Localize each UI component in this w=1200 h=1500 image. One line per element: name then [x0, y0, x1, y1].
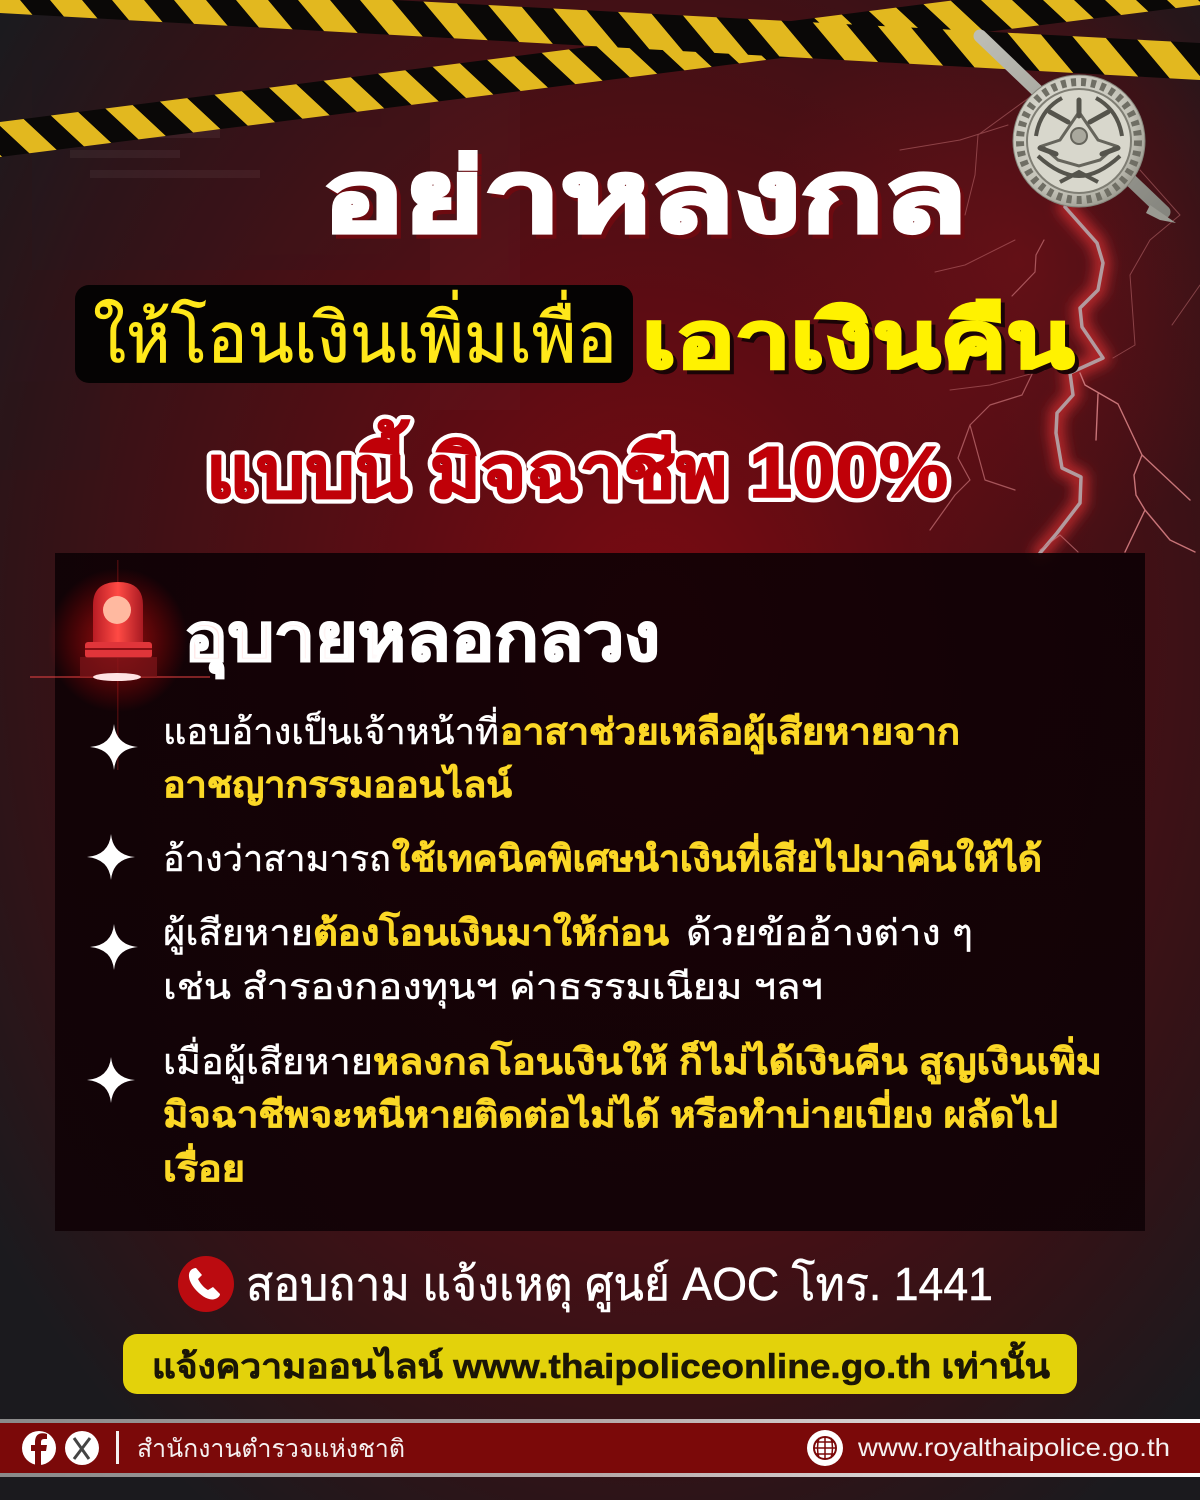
yellow online report pill: แจ้งความออนไลน์ www.thaipoliceonline.go.th เท่านั้น [152, 1341, 1050, 1386]
yellow online report pill [123, 1334, 1077, 1394]
headline: this is 100% scam: แบบนี้ มิจฉาชีพ 100% [206, 419, 948, 513]
footer agency name: สำนักงานตำรวจแห่งชาติ [137, 1435, 405, 1463]
bullet 4: หลงกลโอนเงินให้ ก็ไม่ได้เงินคืน สูญเงินเพิ่ม [373, 1036, 1102, 1085]
footer website: www.royalthaipolice.go.th [857, 1434, 1170, 1462]
subtitle black pill: ให้โอนเงินเพิ่มเพื่อ [93, 290, 617, 377]
bullet 3: ต้องโอนเงินมาให้ก่อน [313, 911, 669, 953]
panel background [55, 553, 1145, 1231]
bullet 3 star [90, 924, 138, 970]
contact line: สอบถาม แจ้งเหตุ ศูนย์ AOC โทร. 1441 [246, 1258, 993, 1313]
bullet 2: ใช้เทคนิคพิเศษนำเงินที่เสียไปมาคืนให้ได้ [392, 833, 1042, 879]
bullet 1 [90, 707, 960, 806]
bullet 4: มิจฉาชีพจะหนีหายติดต่อไม่ได้ หรือทำบ่ายเบี่ยง ผลัดไป [163, 1089, 1058, 1135]
title: do not fall for it: อย่าหลงกล [326, 145, 971, 257]
headline: this is 100% scam: แบบนี้ มิจฉาชีพ 100% [206, 419, 948, 513]
caution tape: descending to right [0, 0, 1200, 80]
bullet 3: ผู้เสียหาย [163, 912, 313, 955]
icon: phone [178, 1256, 234, 1312]
subtitle highlight: get money back: เอาเงินคืน [642, 296, 1074, 384]
footer divider [116, 1431, 119, 1464]
icon: globe [807, 1430, 843, 1466]
icon: facebook [22, 1431, 56, 1465]
icon: red siren [30, 560, 210, 770]
bullet 4 [87, 1036, 1102, 1189]
bullet 4: เมื่อผู้เสียหาย [163, 1037, 373, 1084]
bullet 2 [87, 833, 1042, 880]
panel heading: อุบายหลอกลวง [184, 600, 660, 679]
bullet 1 star [90, 724, 138, 770]
emblem shield [1013, 75, 1145, 207]
lightning bolts [900, 97, 1200, 553]
bullet 4 star [87, 1057, 135, 1103]
bullet 3: ด้วยข้ออ้างต่าง ๆ [686, 912, 973, 953]
bullet 2: อ้างว่าสามารถ [163, 838, 391, 879]
footer bar [0, 1419, 1200, 1477]
bullet 3 [90, 911, 973, 1009]
panel: deception tactics [30, 553, 1145, 1231]
bullet 3: เช่น สำรองกองทุนฯ ค่าธรรมเนียม ฯลฯ [163, 966, 823, 1009]
subtitle highlight: get money back: เอาเงินคืน [646, 300, 1078, 388]
icon: X [65, 1431, 99, 1465]
bullet 1: อาชญากรรมออนไลน์ [163, 763, 512, 806]
right red glow [760, 0, 1200, 560]
bullet 1: อาสาช่วยเหลือผู้เสียหายจาก [500, 711, 960, 755]
title: do not fall for it: อย่าหลงกล [322, 141, 967, 253]
bullet 2 star [87, 834, 135, 880]
faint code screen backdrop [0, 60, 520, 470]
caution tape: rising from left [0, 0, 1200, 157]
bullet 1: แอบอ้างเป็นเจ้าหน้าที่ [163, 707, 499, 752]
police emblem: baton and shield [980, 36, 1176, 223]
bullet 4: เรื่อย [163, 1143, 245, 1189]
emblem baton [980, 36, 1176, 223]
